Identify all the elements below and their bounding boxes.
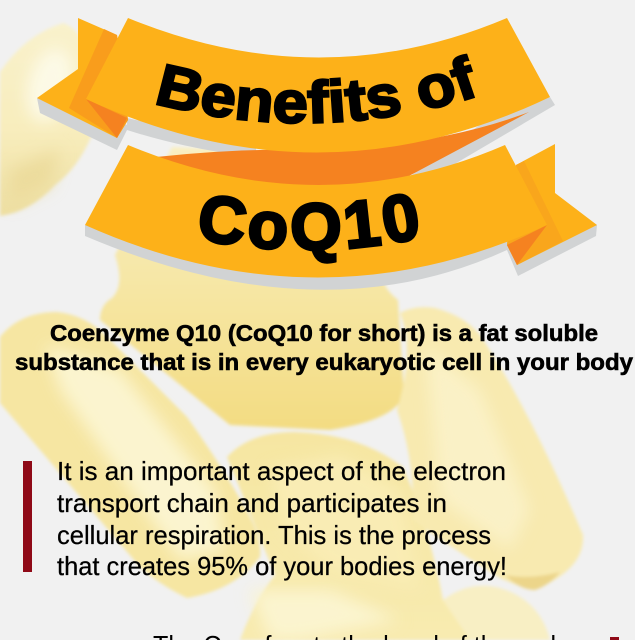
ribbon shadow: lower body xyxy=(85,225,597,290)
title line 1: Benefits of xyxy=(156,54,476,124)
ribbon shadow: under left of body xyxy=(127,118,256,157)
title line 2: CoQ10 xyxy=(200,194,418,264)
banner: CoQ10 xyxy=(85,144,597,290)
ribbon fold: orange underside xyxy=(156,112,529,187)
body paragraph xyxy=(57,456,507,581)
ribbon tail: left xyxy=(37,18,128,138)
highlights xyxy=(10,43,530,640)
banner: Benefits of xyxy=(37,18,555,185)
intro text xyxy=(15,320,633,375)
accent bar xyxy=(23,461,32,572)
intro text: Coenzyme Q10 (CoQ10 for short) is a fat soluble xyxy=(50,320,598,346)
tail crease xyxy=(507,161,563,265)
tail fold xyxy=(507,225,547,265)
body paragraph: cellular respiration. This is the process xyxy=(57,520,491,550)
ribbon tail: right xyxy=(507,144,597,265)
tail fold xyxy=(86,99,127,138)
ribbon body xyxy=(86,18,550,153)
intro text: substance that is in every eukaryotic cell in your body xyxy=(15,349,633,375)
body paragraph: It is an important aspect of the electron xyxy=(57,456,506,486)
tail crease xyxy=(69,29,128,138)
ribbon body xyxy=(85,145,547,278)
body paragraph: that creates 95% of your bodies energy! xyxy=(57,551,507,581)
ribbon shadow: left tail xyxy=(37,98,129,150)
ribbon shadow: right of body xyxy=(405,97,555,180)
cut-off accent bar xyxy=(610,637,619,640)
body paragraph: transport chain and participates in xyxy=(57,488,447,518)
